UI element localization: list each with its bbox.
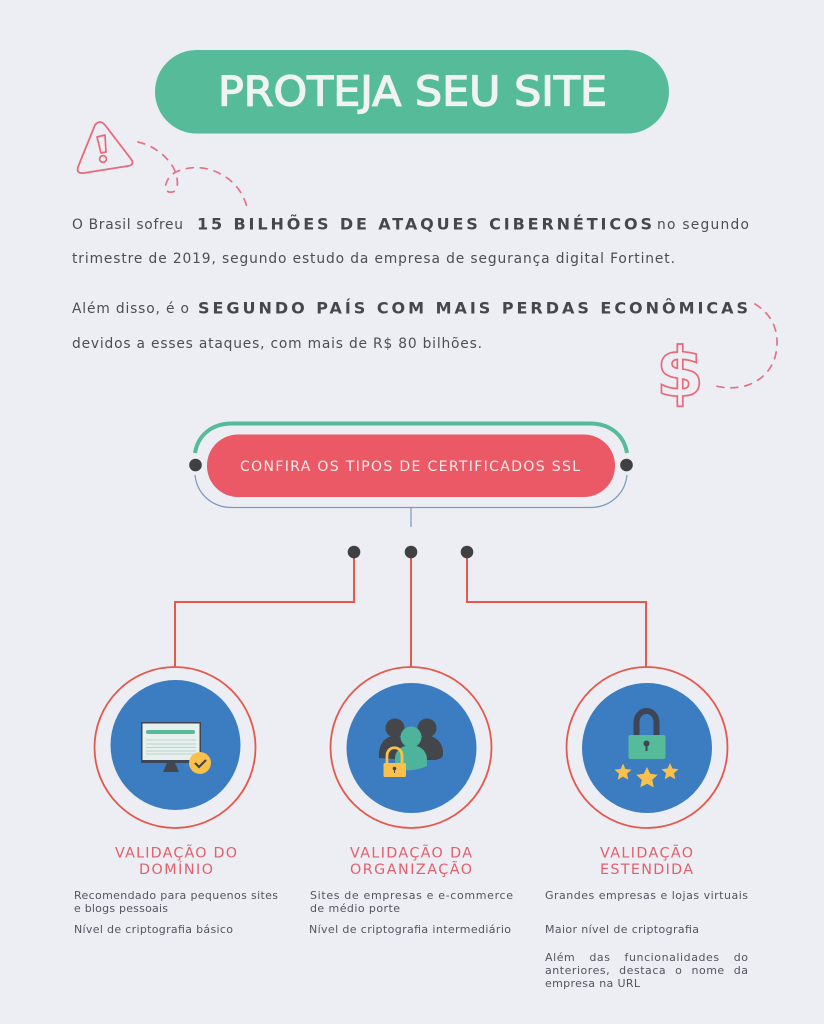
- blue arc: [195, 475, 627, 527]
- description: [545, 889, 748, 990]
- heading: [115, 844, 237, 878]
- ring: [94, 667, 256, 828]
- highlight: second country: SEGUNDO PAÍS COM MAIS PERDAS ECONÔMICAS: [198, 298, 748, 318]
- green arc: [195, 424, 627, 453]
- description: [309, 889, 513, 936]
- description: anteriores, destaca o nome da: [545, 964, 748, 977]
- blue disc: [346, 683, 476, 813]
- description: empresa na URL: [545, 977, 641, 990]
- description: e blogs pessoais: [74, 902, 168, 915]
- text: line 4: devidos a esses ataques, com mais de R$ 80 bilhões.: [72, 336, 482, 352]
- description: Nível de criptografia básico: [74, 923, 233, 936]
- ring: [330, 667, 492, 828]
- left dot: [189, 459, 202, 471]
- description: Recomendado para pequenos sites: [74, 889, 278, 902]
- text: line 1 start: O Brasil sofreu: [72, 217, 183, 233]
- heading: ORGANIZAÇÃO: [350, 861, 472, 878]
- icon: people with lock: [379, 718, 443, 777]
- blue disc: [110, 680, 240, 810]
- icon: warning triangle: [78, 122, 132, 173]
- highlight: 15 billion attacks: 15 BILHÕES DE ATAQUES CIBERNÉTICOS: [197, 214, 652, 234]
- heading: VALIDAÇÃO DO: [115, 844, 237, 862]
- icon: dollar sign: $: [656, 333, 704, 413]
- description: Grandes empresas e lojas virtuais: [545, 889, 748, 902]
- intro paragraph: [72, 214, 749, 267]
- button group: [189, 424, 633, 527]
- title text: PROTEJA SEU SITE: [218, 68, 607, 116]
- description: Além das funcionalidades do: [545, 951, 748, 964]
- description: de médio porte: [310, 902, 400, 915]
- text: line 2: trimestre de 2019, segundo estudo da empresa de segurança digital Fortinet.: [72, 251, 675, 267]
- text: line 1 end: no segundo: [657, 217, 749, 233]
- ring: [566, 667, 728, 828]
- right dot: [620, 459, 633, 471]
- title banner: [155, 50, 669, 134]
- heading: VALIDAÇÃO DA: [350, 844, 472, 862]
- second paragraph: [72, 298, 748, 352]
- heading: [600, 844, 693, 878]
- text: line 3 start: Além disso, é o: [72, 301, 189, 317]
- heading: DOMÍNIO: [139, 860, 213, 878]
- dashed arrow: text to dollar: [712, 304, 777, 388]
- panel: domain validation: [74, 667, 278, 936]
- heading: [350, 844, 472, 878]
- heading: VALIDAÇÃO: [600, 844, 693, 862]
- connectors: [175, 546, 646, 667]
- description: Nível de criptografia intermediário: [309, 923, 511, 936]
- icon: padlock and stars: [614, 711, 678, 787]
- panel: extended validation: [545, 667, 748, 990]
- button: [207, 434, 615, 497]
- blue disc: [582, 683, 712, 813]
- heading: ESTENDIDA: [600, 862, 693, 878]
- description: [74, 889, 278, 936]
- description: Sites de empresas e e-commerce: [310, 889, 513, 902]
- panel: organization validation: [309, 667, 513, 936]
- icon: monitor: [141, 722, 211, 774]
- button label: CONFIRA OS TIPOS DE CERTIFICADOS SSL: [240, 459, 580, 475]
- description: Maior nível de criptografia: [545, 923, 699, 936]
- dashed arrow: warning to text: [138, 142, 247, 207]
